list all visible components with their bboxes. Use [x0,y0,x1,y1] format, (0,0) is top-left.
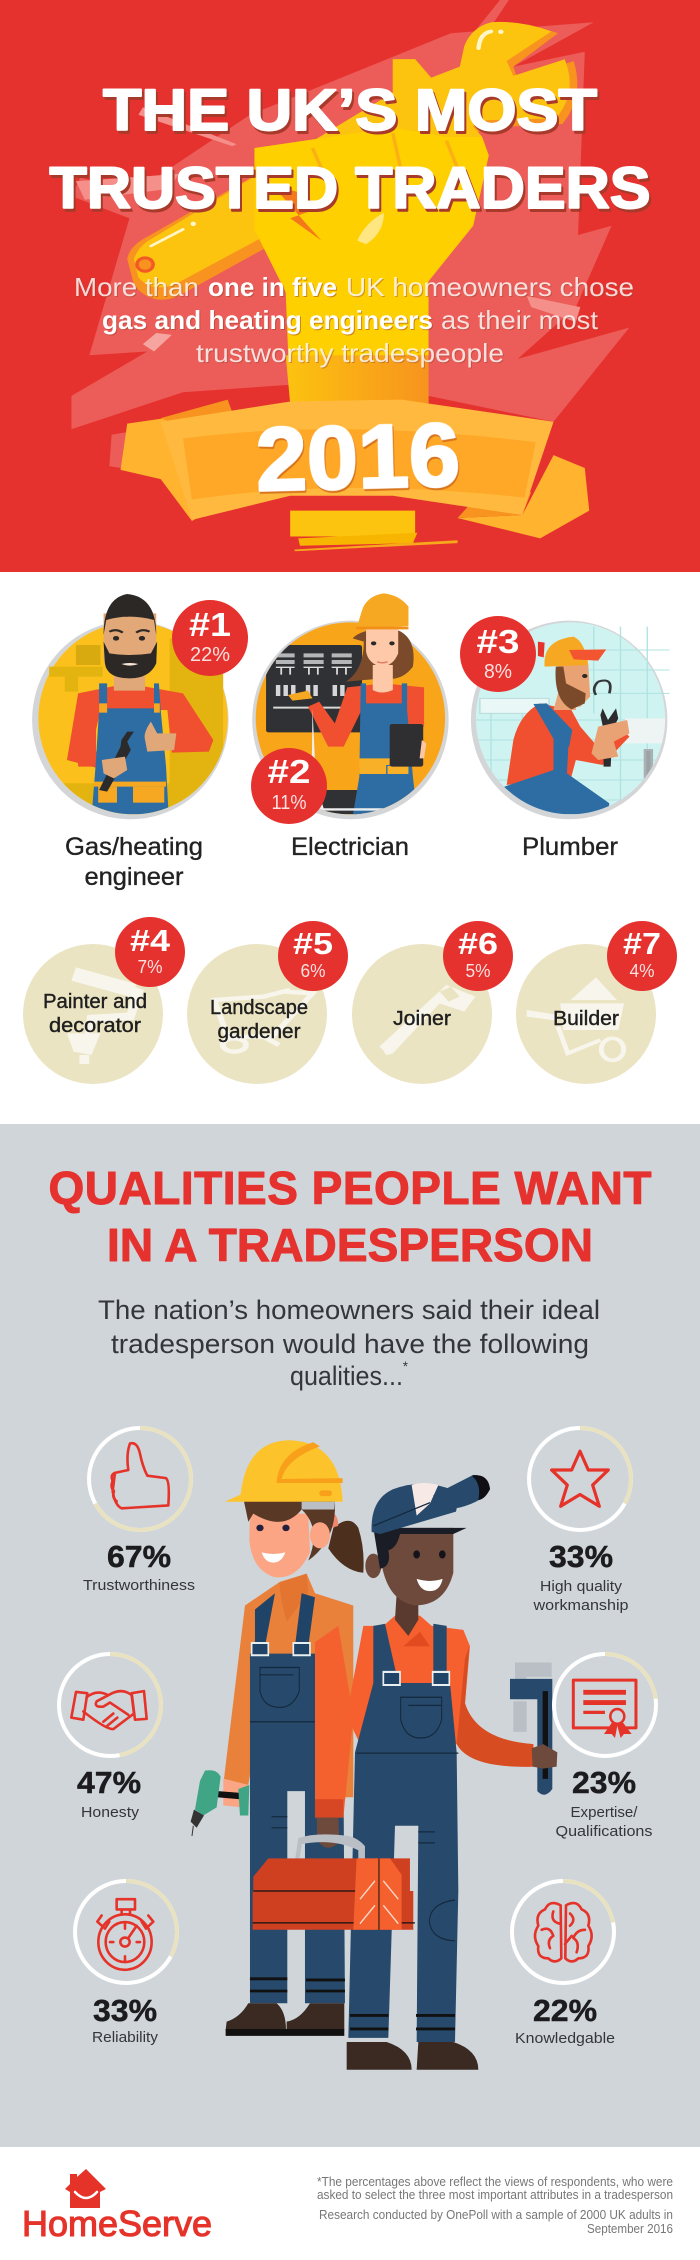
intro text: one in five [208,272,337,302]
badge: #6 5% [443,921,513,991]
quality: knowledgable: Knowledgable [515,2030,615,2047]
footnote: *The percentages above reflect the views of respondents, who were [317,2174,673,2189]
intro text [74,272,634,368]
ribbon banner [121,400,589,538]
hand [532,1744,557,1769]
label: plumber: Plumber [522,833,618,861]
title: TRUSTED TRADERS [50,156,650,221]
intro text: trustworthy tradespeople [196,338,504,368]
label: Builder [553,1008,619,1030]
illustration: man with wrench and toolbox [253,1475,557,2070]
icon: paint roller [67,967,144,1064]
illustration: gas and heating engineer [32,594,229,819]
label: Joiner [393,1008,451,1030]
badge: #2 electrician 11%: #2 [268,753,310,790]
icon: handshake [71,1691,147,1729]
badge: #7 4%: 4% [630,961,654,981]
heading [48,1162,652,1271]
badge: #7 4%: #7 [623,926,661,961]
arm and shirt [224,1574,353,1797]
back arm [315,1626,353,1818]
quality: trustworthiness: Trustworthiness [83,1577,195,1594]
label: gas/heating engineer: Gas/heating [65,833,203,861]
icon: builder's barrow with sand [527,977,624,1060]
label [210,997,308,1043]
icon: hand saw [379,985,475,1055]
badge: #3 plumber 8%: #3 [476,623,520,660]
quality: high quality workmanship: workmanship [532,1597,628,1614]
quality: trustworthiness [83,1428,195,1594]
quality: high quality workmanship: 33% [549,1539,613,1574]
illustration: electrician [252,593,449,819]
overalls [348,1624,458,2042]
icon: garden wheelbarrow [214,990,312,1052]
quality: reliability [75,1881,177,2046]
badge: #2 electrician 11% [251,748,327,824]
progress ring 33% [75,1881,177,1983]
badge: #5 6%: 6% [300,961,326,981]
year: 2016 [255,405,461,511]
boots [347,2042,478,2070]
intro text: * [403,1358,409,1374]
head [249,1514,310,1577]
panel: qualities [0,1124,700,2147]
progress ring 67% [89,1428,191,1530]
intro text: gas and heating engineers [102,305,433,335]
panel: top three trades [23,593,677,1084]
quality: high quality workmanship: High quality [540,1578,623,1595]
logo: HomeServe: HomeServe [22,2203,212,2244]
illustration: plumber [471,621,670,819]
label: Landscape [210,997,308,1019]
icon: stopwatch [97,1899,153,1970]
heading: QUALITIES PEOPLE WANT [48,1162,652,1214]
badge: #7 4% [607,921,677,991]
spanner [127,22,577,300]
badge: #5 6%: #5 [293,926,333,961]
pipe wrench [513,1663,552,1732]
quality: honesty: 47% [77,1765,141,1800]
intro text [98,1295,600,1391]
badge: #1 gas and heating engineer 22%: #1 [189,606,231,643]
progress ring 23% [554,1654,656,1756]
badge: #2 electrician 11%: 11% [272,792,307,814]
icon: certificate [573,1680,636,1738]
footnote: Research conducted by OnePoll with a sample of 2000 UK adults in [319,2207,673,2222]
panel: footer [0,2147,700,2260]
badge: #5 6% [278,921,348,991]
label: Painter and [43,991,147,1013]
boots [226,2003,286,2030]
card: builder [516,921,677,1084]
quality: honesty: Honesty [81,1804,140,1821]
card: joiner [352,921,513,1084]
badge: #1 gas and heating engineer 22% [172,600,248,676]
intro text: More than [74,272,199,302]
quality: expertise and qualifications: Qualifications [556,1823,652,1840]
icon: thumbs up [112,1443,169,1508]
quality: reliability: Reliability [92,2029,158,2046]
label: gas/heating engineer: engineer [84,863,184,891]
cap [372,1484,460,1534]
neck and head [395,1593,418,1636]
illustration: woman with drill [191,1440,364,2036]
progress ring 33% [529,1428,631,1530]
label [43,991,147,1037]
quality: trustworthiness: 67% [107,1539,171,1574]
logo: HomeServe [22,2169,212,2244]
intro text: qualities... [290,1361,412,1391]
badge: #4 7%: #4 [130,923,171,958]
progress ring 47% [59,1654,161,1756]
quality: knowledgable: 22% [533,1993,597,2028]
heading: IN A TRADESPERSON [107,1219,593,1271]
background shards [71,0,629,470]
title [50,78,650,221]
icon: star [552,1451,608,1506]
badge: #6 5%: 5% [466,961,490,981]
footnote: asked to select the three most important attributes in a tradesperson [317,2187,673,2202]
fist [254,59,489,403]
quality: expertise and qualifications [554,1654,656,1840]
icon: smiling house [65,2169,106,2208]
label: gardener [218,1021,301,1043]
toolbox [253,1834,415,1930]
man's body [315,1475,557,2070]
hard hat [225,1440,343,1502]
quality: expertise and qualifications: 23% [572,1765,636,1800]
badge: #3 plumber 8% [460,616,536,692]
drill and hand [223,1779,248,1807]
progress ring 22% [512,1881,614,1983]
quality: expertise and qualifications: Expertise/ [570,1804,638,1821]
quality: reliability: 33% [93,1993,157,2028]
card: landscape gardener [187,921,348,1084]
badge: #1 gas and heating engineer 22%: 22% [190,644,230,666]
badge: #6 5%: #6 [458,926,498,961]
quality: honesty [59,1654,161,1821]
badge: #4 7%: 7% [138,957,162,977]
footnote [317,2174,673,2236]
intro text: UK homeowners chose [346,272,634,302]
icon: brain [535,1903,592,1961]
footnote: September 2016 [587,2221,673,2236]
quality: high quality workmanship [529,1428,631,1614]
shirt [347,1616,533,1767]
intro text: The nation’s homeowners said their ideal [98,1295,600,1325]
badge: #3 plumber 8%: 8% [484,661,512,683]
card: painter and decorator [23,917,185,1084]
overalls [255,1593,315,1646]
ponytail [328,1521,364,1573]
quality: knowledgable [512,1881,615,2047]
intro text: tradesperson would have the following [111,1329,589,1359]
badge: #4 7% [115,917,185,987]
panel: header [0,0,700,572]
label: electrician: Electrician [291,833,409,861]
intro text: as their most [441,305,599,335]
label: decorator [49,1015,141,1037]
title: THE UK’S MOST [103,78,597,143]
label: gas/heating engineer [65,833,203,891]
illustration: fist holding spanner [127,22,577,551]
